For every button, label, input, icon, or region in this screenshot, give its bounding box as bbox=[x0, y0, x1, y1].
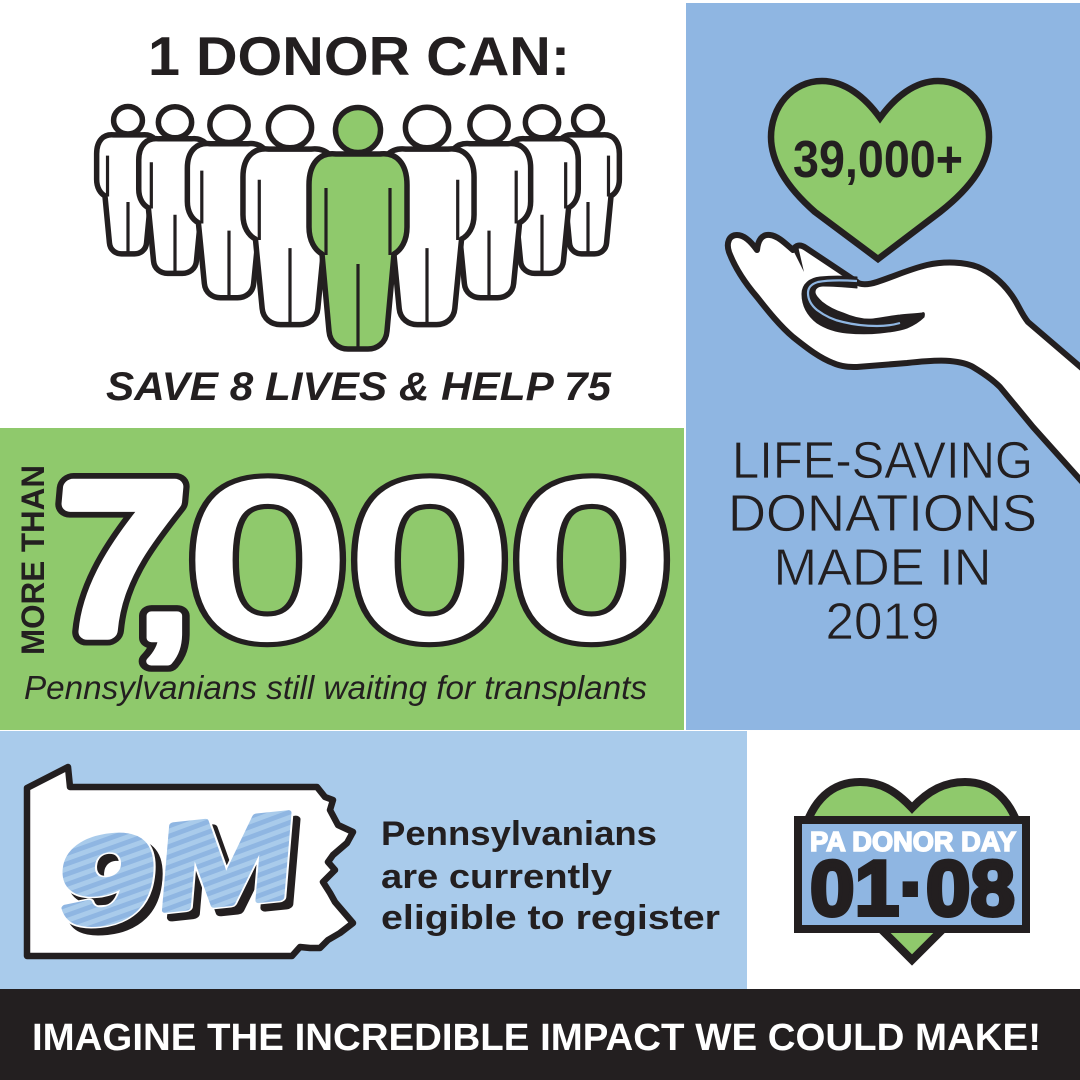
banner: imagine the impact bbox=[0, 989, 1080, 1080]
subheading: save 8 lives: SAVE 8 LIVES & HELP 75 bbox=[106, 365, 612, 409]
text: eligible to register: are currently bbox=[381, 858, 612, 896]
number: 7,000: 7 bbox=[44, 442, 189, 675]
banner: imagine the impact: IMAGINE THE INCREDIBLE IMPACT WE COULD MAKE! bbox=[32, 1017, 1041, 1059]
number: 7,000 bbox=[44, 439, 668, 681]
mask outside the heart bottom bbox=[790, 925, 1034, 975]
number: 7,000: , bbox=[139, 503, 189, 671]
text: date 01.08: 01·08 bbox=[810, 844, 1015, 932]
text: life-saving donations made in 2019 bbox=[728, 432, 1037, 651]
number: 9M: M bbox=[160, 792, 308, 944]
text: eligible to register: Pennsylvanians bbox=[381, 815, 657, 853]
panel: life-saving donations bbox=[686, 3, 1080, 730]
text: PA donor day: PA DONOR DAY bbox=[810, 826, 1016, 857]
number: 7,000: 0 bbox=[191, 439, 344, 681]
text: eligible to register: eligible to register bbox=[381, 899, 720, 937]
text: life-saving donations made in 2019: DONATIONS bbox=[728, 485, 1037, 543]
number: 9M bbox=[54, 785, 308, 960]
heading: 1 donor can: 1 DONOR CAN: bbox=[148, 25, 570, 87]
panel: more than 7,000 waiting bbox=[0, 428, 684, 730]
number: 7,000: 0 bbox=[515, 439, 668, 681]
text: life-saving donations made in 2019: MADE IN bbox=[774, 539, 992, 597]
number: 9M: 9 bbox=[54, 806, 161, 953]
icon: green heart with count bbox=[771, 81, 989, 259]
icon: badge heart bbox=[803, 782, 1021, 960]
number: 9M: 9 bbox=[61, 813, 168, 960]
icon: open hand bbox=[728, 235, 1080, 484]
icon: green heart with count: 39,000+ bbox=[793, 131, 963, 189]
finger gap bbox=[793, 246, 804, 272]
number: 9M: 9 bbox=[54, 806, 161, 953]
number: 7,000: , bbox=[139, 503, 189, 671]
number: 9M: M bbox=[153, 785, 301, 937]
number: 9M: M bbox=[153, 785, 301, 937]
text: life-saving donations made in 2019: LIFE-SAVING bbox=[732, 432, 1033, 490]
icon: group of nine people bbox=[97, 107, 619, 349]
badge: PA donor day bbox=[790, 782, 1034, 975]
panel: 9M eligible bbox=[0, 731, 747, 989]
text: life-saving donations made in 2019: 2019 bbox=[826, 593, 940, 651]
number: 7,000: 0 bbox=[515, 439, 668, 681]
label: more than: MORE THAN bbox=[15, 465, 51, 655]
number: 7,000: 7 bbox=[44, 442, 189, 675]
number: 7,000: 0 bbox=[353, 439, 506, 681]
icon: Pennsylvania map bbox=[27, 767, 353, 956]
panel: one donor can bbox=[97, 25, 619, 409]
number: 7,000: 0 bbox=[191, 439, 344, 681]
number: 7,000: 0 bbox=[353, 439, 506, 681]
caption: pennsylvanians waiting: Pennsylvanians still waiting for transplants bbox=[24, 669, 647, 706]
text: eligible to register bbox=[381, 815, 720, 937]
